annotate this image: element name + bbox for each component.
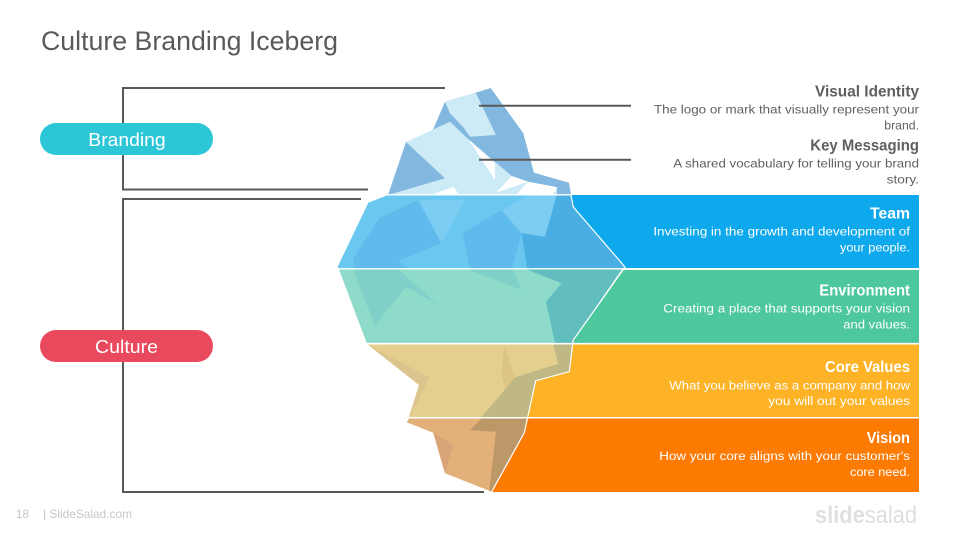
text: core values: Core Values xyxy=(825,359,910,376)
text: environment: Environment xyxy=(819,282,911,299)
band: environment xyxy=(573,270,919,343)
text: team: Team xyxy=(870,205,910,222)
text: vision: How your core aligns with your customer's xyxy=(659,449,910,463)
coloured bands xyxy=(492,195,919,492)
iceberg: vision layer xyxy=(407,418,527,492)
pill: branding: Branding xyxy=(88,129,166,150)
text: vision: Vision xyxy=(867,430,910,447)
band: team xyxy=(571,195,919,268)
text: visual identity xyxy=(654,84,919,132)
iceberg: core values layer xyxy=(368,344,573,417)
band separators xyxy=(338,195,919,418)
text: environment: and values. xyxy=(843,317,910,331)
pill: culture xyxy=(40,330,213,362)
pointer: key messaging xyxy=(479,159,631,161)
text: visual identity: Visual Identity xyxy=(815,84,919,101)
iceberg: above water xyxy=(388,88,571,195)
text: vision: core need. xyxy=(850,465,910,479)
band: core values xyxy=(528,344,919,417)
text: core values: you will out your values xyxy=(768,394,910,408)
text: vision xyxy=(659,430,910,479)
pill: culture: Culture xyxy=(95,336,158,357)
text: team xyxy=(653,205,911,255)
bracket: culture xyxy=(123,199,484,492)
band: vision xyxy=(492,418,919,492)
bracket: branding xyxy=(123,88,445,190)
pointer: visual identity xyxy=(479,105,631,107)
text: team: Investing in the growth and development of xyxy=(653,225,911,239)
text: team: your people. xyxy=(840,241,910,255)
iceberg: environment layer xyxy=(339,270,622,343)
text: environment: Creating a place that supports your vision xyxy=(663,301,910,315)
title: Culture Branding Iceberg xyxy=(41,26,338,56)
text: core values: What you believe as a company and how xyxy=(669,378,910,392)
footer: page number: 18 xyxy=(16,507,29,521)
iceberg: team layer xyxy=(338,195,625,268)
iceberg: white outline xyxy=(492,195,625,492)
text: core values xyxy=(669,359,910,408)
text: key messaging: Key Messaging xyxy=(810,138,919,155)
text: environment xyxy=(663,282,911,331)
pill: branding xyxy=(40,123,213,155)
text: visual identity: brand. xyxy=(884,118,919,132)
footer: site name: | SlideSalad.com xyxy=(43,507,132,521)
text: key messaging: A shared vocabulary for telling your brand xyxy=(673,156,919,170)
text: key messaging xyxy=(673,138,919,186)
iceberg xyxy=(338,88,625,492)
text: key messaging: story. xyxy=(887,172,919,186)
logo: slidesalad wordmark: slidesalad xyxy=(815,502,917,529)
text: visual identity: The logo or mark that visually represent your xyxy=(654,102,919,116)
